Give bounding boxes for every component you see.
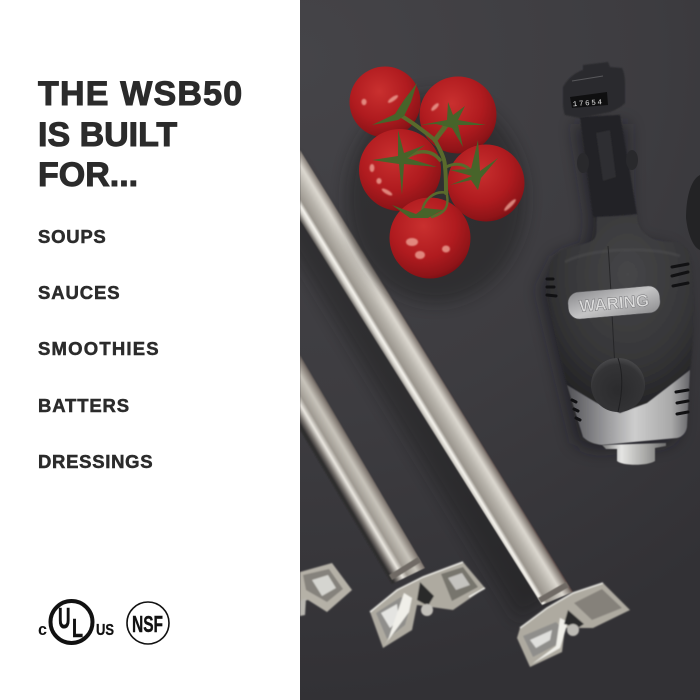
icon: cULus mark (38, 601, 114, 643)
background surface (300, 0, 700, 700)
icon: NSF mark (127, 602, 169, 644)
blade: left (300, 563, 352, 616)
heading: the WSB50 is built for: FOR... (38, 156, 138, 194)
list item: soups: SOUPS (38, 226, 107, 247)
counter display: 17654 (573, 99, 604, 109)
counter display (570, 92, 608, 109)
motor housing (547, 215, 693, 413)
list item: sauces: SAUCES (38, 282, 120, 303)
heading: the WSB50 is built for (38, 75, 243, 194)
short blending shaft (300, 355, 425, 584)
product photo panel (300, 0, 700, 700)
silver base (567, 370, 690, 445)
blade: middle (370, 562, 485, 648)
vents (547, 264, 688, 420)
second blender edge (686, 175, 700, 250)
tomato vine (400, 115, 475, 217)
long blending shaft (280, 150, 573, 620)
icon: cULus mark: L (72, 613, 83, 643)
list item: dressings: DRESSINGS (38, 451, 153, 472)
certification logos (38, 599, 170, 645)
icon: cULus mark: c (38, 620, 47, 639)
blender neck (580, 115, 637, 217)
immersion blender (539, 62, 693, 465)
icon: cULus mark: US (96, 622, 114, 639)
list item: smoothies: SMOOTHIES (38, 338, 160, 359)
power knob (591, 358, 645, 412)
blade: right (517, 583, 630, 667)
icon: cULus mark: U (58, 603, 70, 635)
Waring badge: WARING (578, 291, 650, 316)
blender head (563, 62, 625, 118)
icon: NSF mark: NSF (132, 611, 163, 637)
heading: the WSB50 is built for: IS BUILT (38, 116, 177, 154)
list item: batters: BATTERS (38, 395, 130, 416)
heading: the WSB50 is built for: THE WSB50 (38, 75, 243, 113)
Waring badge (567, 285, 661, 320)
tomatoes on the vine (346, 66, 526, 303)
blender nozzle (602, 443, 666, 465)
